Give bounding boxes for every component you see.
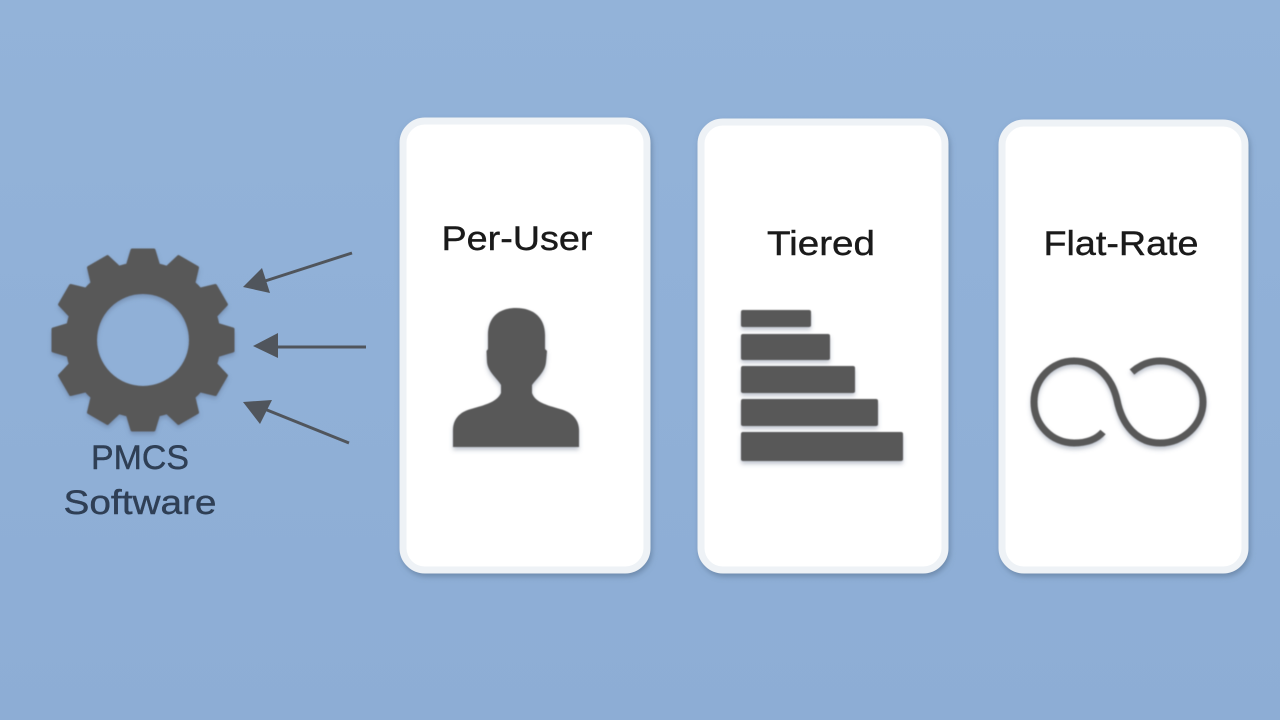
panel: Per-User [403, 121, 647, 570]
label: PMCS Software: PMCS [91, 439, 189, 477]
label: PMCS Software: Software [64, 484, 216, 522]
card [403, 121, 647, 570]
arrow: top [243, 253, 352, 293]
card [1002, 123, 1245, 570]
arrow: bottom [243, 400, 349, 443]
gear group with label [53, 250, 233, 522]
panel: Tiered [701, 122, 945, 570]
card [701, 122, 945, 570]
arrow: middle [253, 333, 366, 358]
heading: Tiered [767, 225, 875, 263]
panel: Flat-Rate [1002, 123, 1245, 570]
icon: gear [53, 250, 233, 430]
icon: infinity [1034, 361, 1203, 443]
heading: Flat-Rate [1044, 225, 1198, 263]
label: PMCS Software [64, 439, 216, 522]
icon: tier bars [741, 310, 903, 461]
heading: Per-User [442, 220, 592, 258]
arrows pointing to gear [243, 253, 366, 443]
icon: person [453, 308, 579, 447]
